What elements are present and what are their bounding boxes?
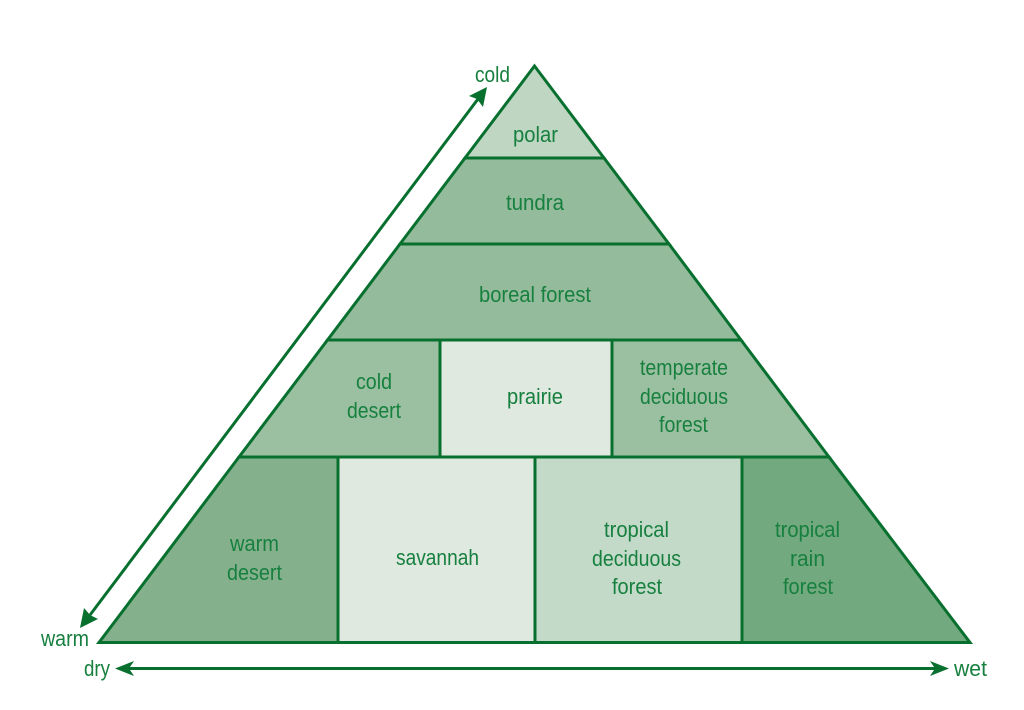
panel: biome pyramid xyxy=(99,66,970,642)
cell: warm desert: desert xyxy=(227,560,282,585)
cell: tropical deciduous forest xyxy=(535,457,742,642)
cell: savannah xyxy=(338,457,535,642)
cell: tropical rain forest: tropical xyxy=(775,517,840,542)
cell: temperate deciduous forest: deciduous xyxy=(640,384,728,409)
axis label: dry: dry xyxy=(84,656,110,681)
cell: tropical deciduous forest: deciduous xyxy=(592,546,681,571)
axis label: cold: cold xyxy=(475,62,510,87)
band: tundra: tundra xyxy=(506,190,565,215)
cell: tropical deciduous forest: tropical xyxy=(604,517,669,542)
cell: tropical rain forest: rain xyxy=(790,546,825,571)
cell: cold desert: cold xyxy=(356,369,392,394)
axis label: warm: warm xyxy=(40,626,89,651)
cell: tropical rain forest: forest xyxy=(783,574,833,599)
cell: warm desert xyxy=(99,457,338,642)
cell: prairie: prairie xyxy=(507,384,563,409)
cell: tropical rain forest xyxy=(742,457,970,642)
axis label: wet: wet xyxy=(953,656,987,681)
cell: temperate deciduous forest: forest xyxy=(659,412,708,437)
cell: savannah: savannah xyxy=(396,545,479,570)
arrow: dry to wet axis xyxy=(115,661,949,676)
band: boreal forest xyxy=(328,244,741,340)
cell: cold desert xyxy=(239,340,440,457)
cell: temperate deciduous forest xyxy=(612,340,829,457)
cell: tropical deciduous forest: forest xyxy=(612,574,662,599)
cell: warm desert: warm xyxy=(229,531,279,556)
arrow: warm to cold axis xyxy=(80,87,487,628)
cell: temperate deciduous forest: temperate xyxy=(640,355,728,380)
band: boreal forest: boreal forest xyxy=(479,282,591,307)
band: polar: polar xyxy=(513,122,558,147)
band: tundra xyxy=(400,158,669,244)
cell: prairie xyxy=(440,340,612,457)
band: polar xyxy=(465,66,604,158)
cell: cold desert: desert xyxy=(347,398,401,423)
